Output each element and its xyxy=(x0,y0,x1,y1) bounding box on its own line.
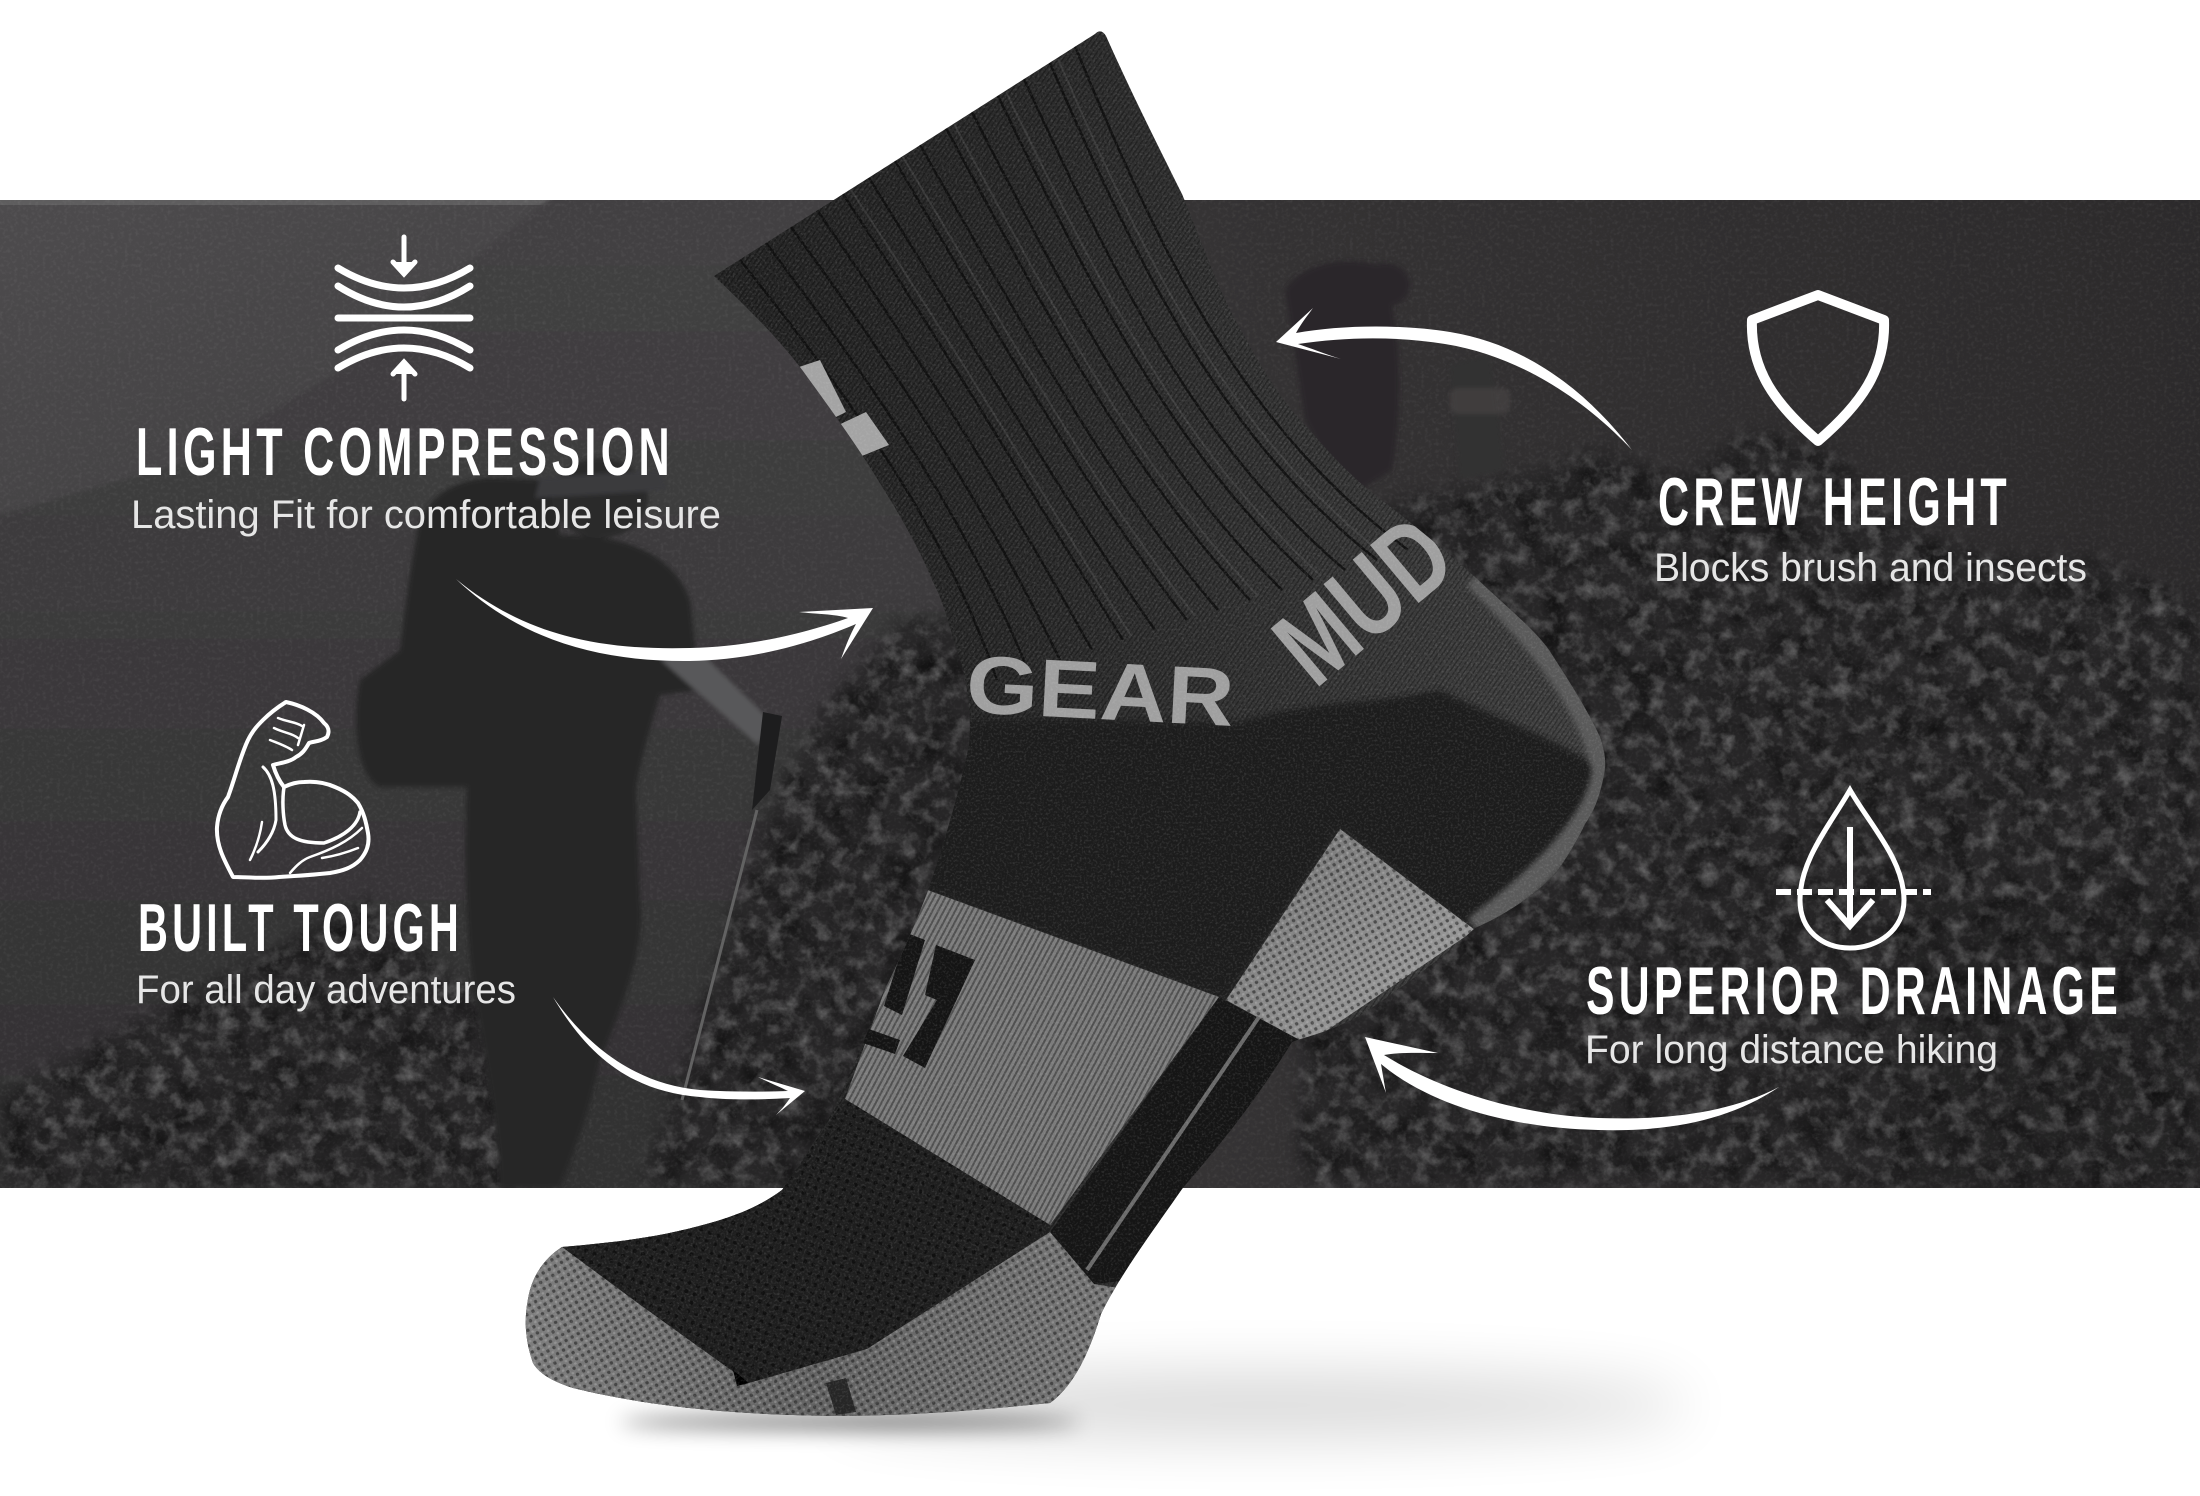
callout: crew height xyxy=(1654,295,2087,590)
arrow: crew height to cuff xyxy=(1276,308,1632,450)
rib lines on leg xyxy=(740,46,1408,680)
shadow under sock xyxy=(620,1375,1690,1435)
ankle band word GEAR: GEAR xyxy=(964,639,1236,744)
subtext: Lasting Fit for comfortable leisure xyxy=(131,493,721,537)
subtext: For long distance hiking xyxy=(1585,1028,1998,1072)
icon: flexed arm xyxy=(217,702,369,878)
subtext: For all day adventures xyxy=(136,968,516,1012)
heading: CREW HEIGHT xyxy=(1658,464,2011,540)
ankle band word MUD: MUD xyxy=(1251,492,1476,708)
logo: grey mark on cuff xyxy=(796,360,889,460)
arrow: superior drainage to heel xyxy=(1365,1037,1779,1130)
icon: compression arcs and arrows xyxy=(338,237,470,399)
heading: LIGHT COMPRESSION xyxy=(136,414,674,490)
subtext: Blocks brush and insects xyxy=(1654,546,2087,590)
heading: BUILT TOUGH xyxy=(138,890,463,966)
arrow: built tough to midfoot xyxy=(553,997,805,1115)
product: black and grey crew sock xyxy=(500,0,1650,1430)
panel: dark mountain hiking photo banner xyxy=(0,190,2200,1230)
callout: light compression xyxy=(131,237,721,537)
arrow: light compression to leg xyxy=(456,579,873,661)
callout: built tough xyxy=(136,702,516,1012)
icon: water drop with drain arrow xyxy=(1776,790,1931,948)
callout: superior drainage xyxy=(1585,790,2122,1072)
icon: shield xyxy=(1752,295,1884,441)
logo: grey panel mark on foot xyxy=(860,933,975,1068)
